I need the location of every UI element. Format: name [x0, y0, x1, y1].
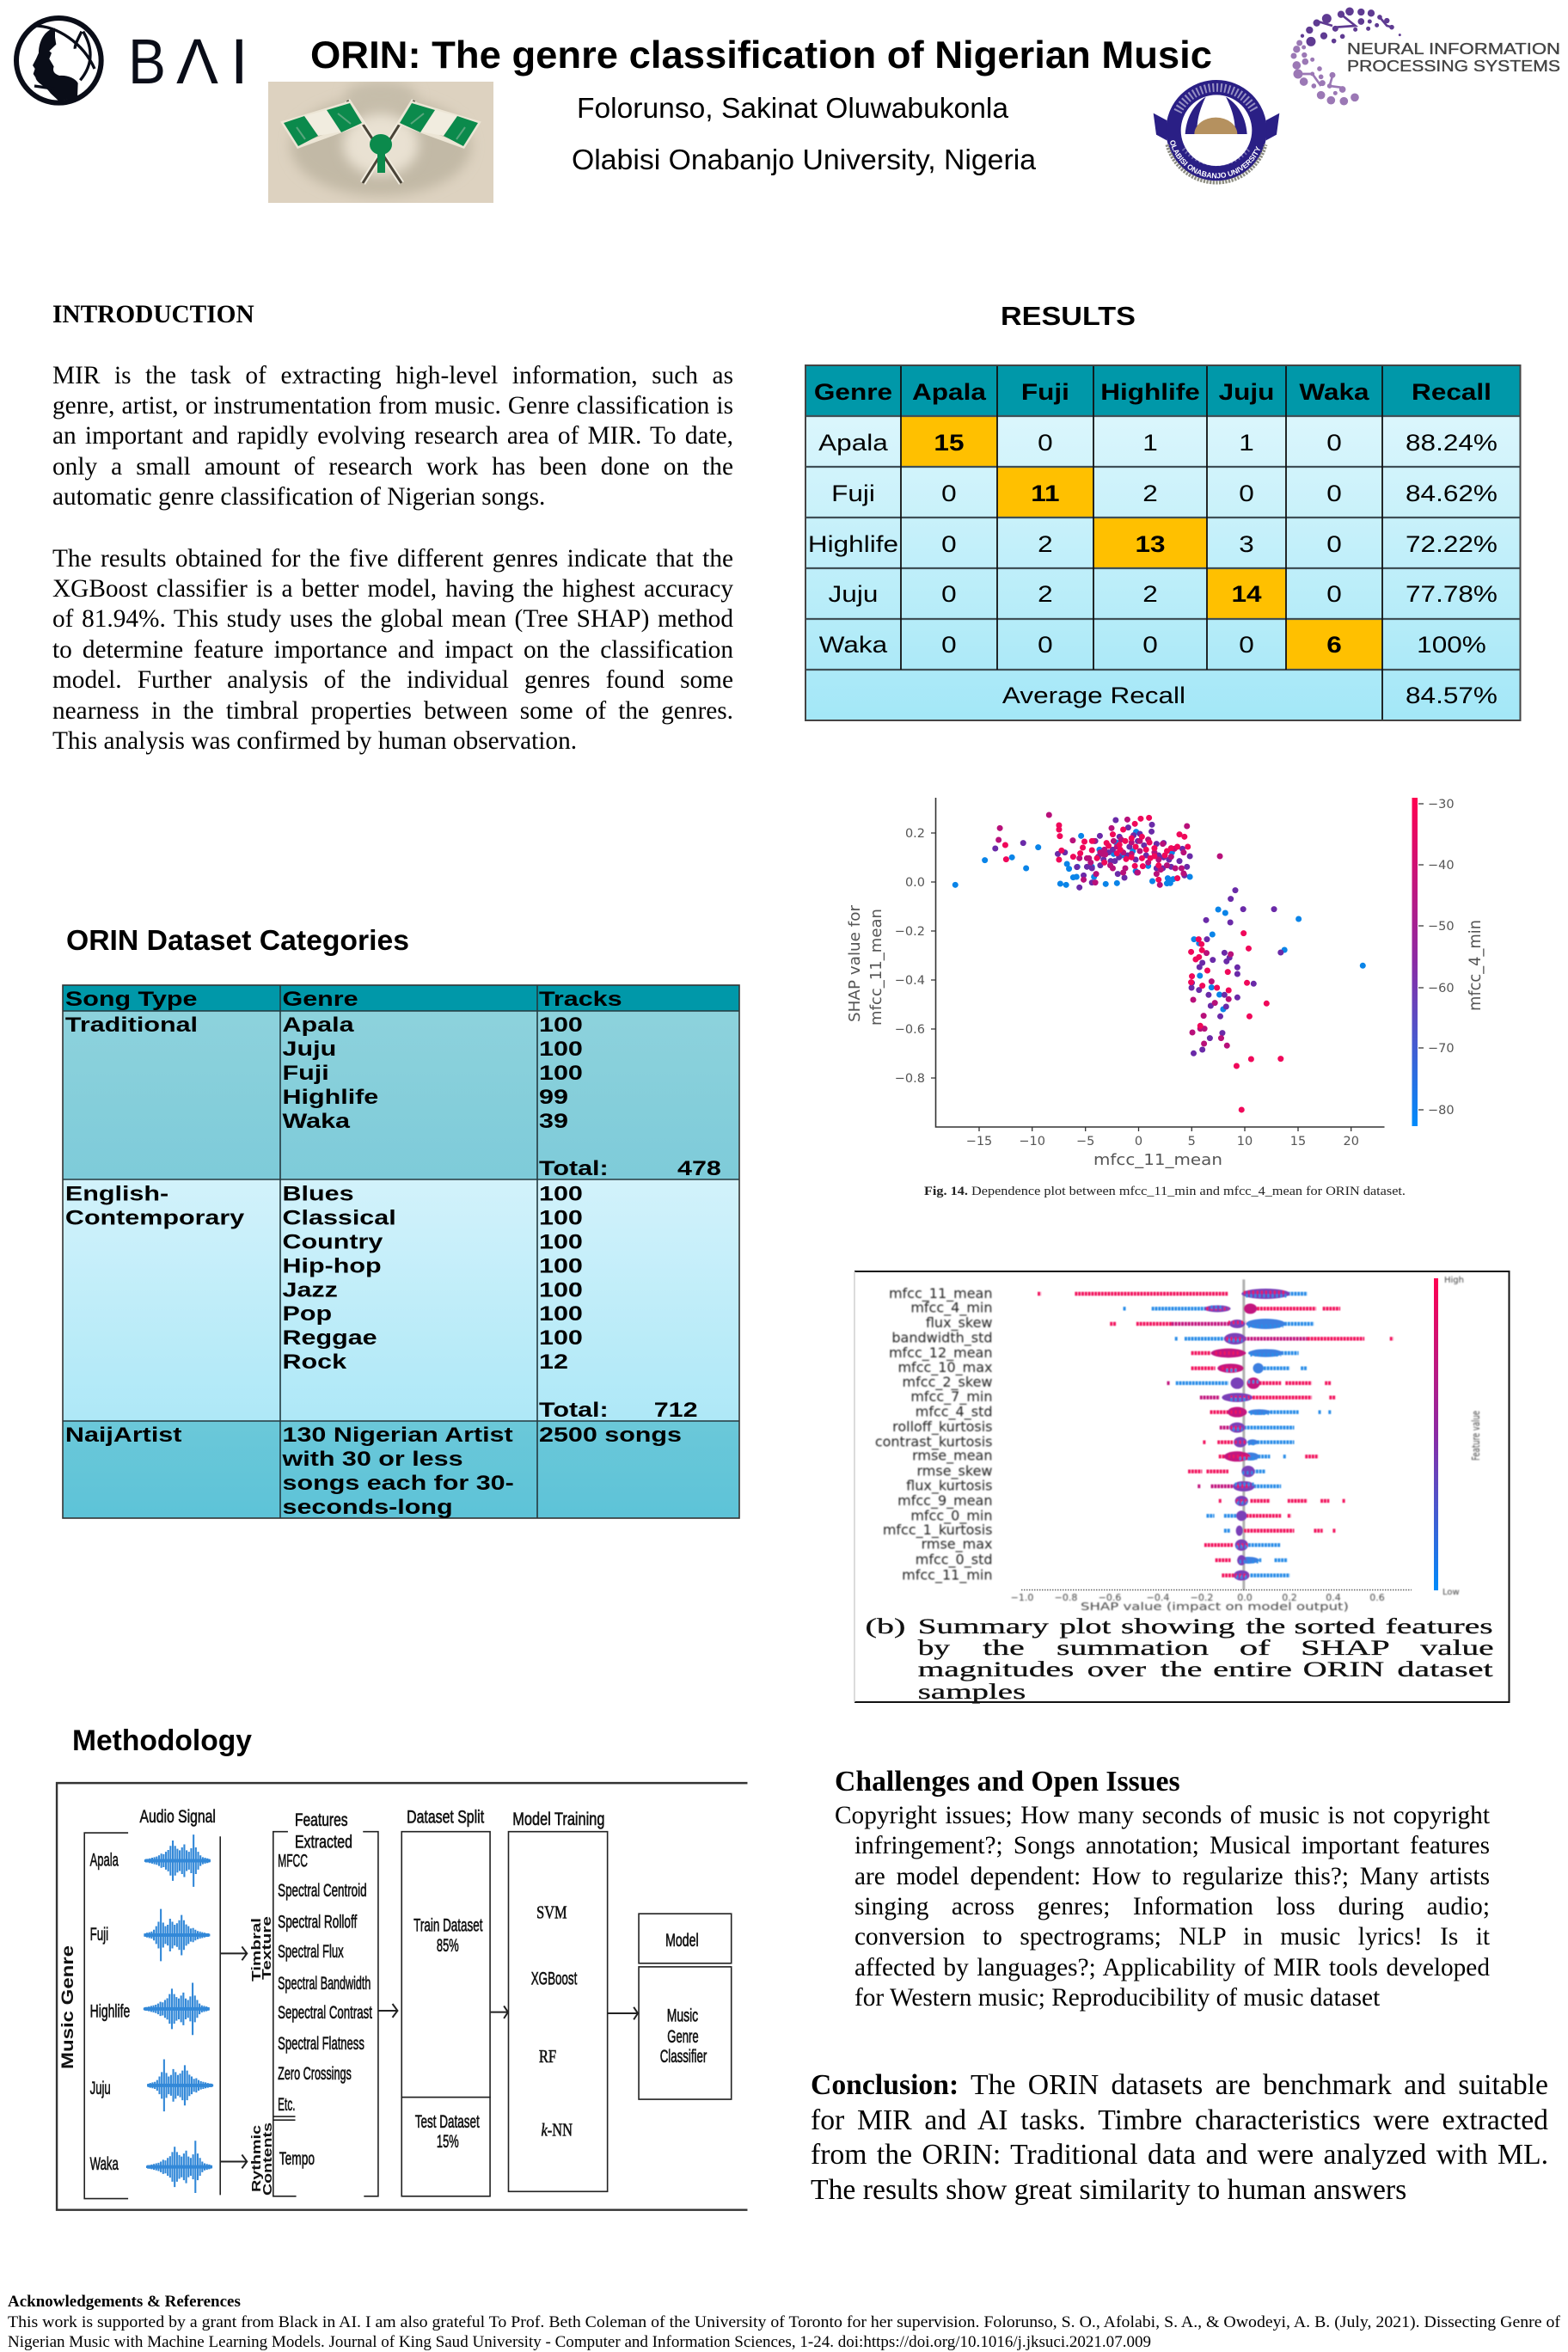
column: dataset split: 15% [437, 2131, 459, 2152]
table header: Highlife [1100, 380, 1200, 405]
row: English-Contemporary: Country [283, 1230, 383, 1253]
column: audio signals by genre [84, 1806, 220, 2199]
affiliation: Olabisi Onabanjo University, Nigeria [572, 144, 1037, 175]
rotated labels: Texture [260, 1916, 274, 1980]
figure caption: showing [1121, 1614, 1235, 1638]
row: English-Contemporary: 100 [539, 1182, 583, 1205]
row: traditional: Fuji [283, 1061, 329, 1084]
figure caption: dataset [1397, 1657, 1493, 1681]
text block: introduction paragraph 2: of 81.94%. This study uses the global mean (Tree SHAP) method [52, 605, 733, 633]
figure caption: Summary [918, 1614, 1050, 1638]
acknowledgements and references [8, 2293, 1561, 2351]
x axis: 0.6 [1369, 1592, 1385, 1603]
tick labels: 0 [1135, 1135, 1142, 1148]
text block: challenges and open issues: infringement?; Songs annotation; Musical important features [854, 1832, 1490, 1859]
text block: challenges and open issues: singing across genres; Information loss during audio; [854, 1893, 1490, 1920]
row: Fuji: 0 [941, 481, 957, 506]
feature labels: mfcc_11_mean [889, 1285, 992, 1302]
text block: introduction paragraph 2: XGBoost classifier is a better model, having the highest accuracy [52, 575, 733, 603]
row: traditional: Apala [283, 1013, 354, 1036]
highlighted diagonal cells [901, 416, 1382, 670]
logo letters: Λ [176, 26, 219, 97]
colour bar: −70 [1428, 1042, 1455, 1056]
axis titles: mfcc_11_mean [867, 909, 885, 1026]
row: Highlife: 13 [1136, 532, 1166, 557]
row: English-Contemporary: 100 [539, 1302, 583, 1325]
tick labels: 0.2 [905, 827, 925, 841]
arrows [220, 1946, 638, 2168]
column: features extracted: Extracted [295, 1831, 352, 1852]
column: model output: Classifier [660, 2046, 707, 2067]
diagram: methodology pipeline: Test Dataset [415, 2111, 480, 2131]
row: Waka: 0 [1239, 633, 1254, 658]
row: Waka: 0 [1038, 633, 1053, 658]
diagram: methodology pipeline: Train Dataset [413, 1914, 483, 1935]
text block: challenges and open issues: affected by languages?; Applicability of MIR tools developed [854, 1954, 1490, 1981]
colour bar: −80 [1428, 1104, 1455, 1118]
logo letters: B [128, 26, 166, 97]
column: model output: Genre [667, 2026, 699, 2046]
table header [814, 380, 1491, 405]
row: Waka: 100% [1417, 633, 1486, 658]
text block: introduction paragraph 1 [52, 362, 733, 511]
row: Fuji [831, 481, 1498, 506]
row: Apala [818, 431, 1498, 456]
row: English-Contemporary: 100 [539, 1278, 583, 1302]
figure caption [866, 1614, 1494, 1704]
acknowledgements and references: Nigerian Music with Machine Learning Models. Journal of King Saud University - Computer and Information Sciences, 1-24. doi:https://doi.org/10.1016/j.jksuci.2021.07.009 [8, 2333, 1151, 2351]
column: features extracted: Features [295, 1810, 348, 1830]
column: model training: Model Training [512, 1809, 604, 1829]
frame [854, 1271, 1510, 1702]
logo letters [128, 26, 248, 97]
heading: introduction: INTRODUCTION [52, 301, 254, 328]
row: NaijArtist [65, 1423, 682, 1518]
row: Waka: 0 [941, 633, 957, 658]
table header: Waka [1299, 380, 1369, 405]
column: model training: XGBoost [531, 1968, 577, 1988]
row: English-Contemporary: Blues [283, 1182, 354, 1205]
column: audio signals by genre: Audio Signal [139, 1806, 216, 1827]
row: English-Contemporary: Pop [283, 1302, 332, 1325]
text block: introduction paragraph 1: automatic genre classification of Nigerian songs. [52, 483, 545, 511]
tick labels [895, 827, 1359, 1148]
row: English-Contemporary: 100 [539, 1230, 583, 1253]
text block: challenges and open issues: Copyright issues; How many seconds of music is not copyright [835, 1802, 1490, 1829]
text block: conclusion: Conclusion: The ORIN datasets are benchmark and suitable [811, 2069, 1548, 2101]
row: Apala: 0 [1038, 431, 1053, 456]
row: English-Contemporary: Reggae [283, 1326, 377, 1349]
tick labels: 0.0 [905, 876, 925, 890]
colour bar: −30 [1428, 798, 1455, 812]
row: Apala: Apala [818, 431, 889, 456]
beeswarm rows [1038, 1279, 1393, 1590]
feature labels: mfcc_12_mean [889, 1344, 992, 1362]
figure caption: samples [918, 1680, 1026, 1704]
tick labels: 5 [1188, 1135, 1196, 1148]
figure caption: summation [1057, 1636, 1209, 1660]
text block: introduction paragraph 1: an important and rapidly evolving research area of MIR. To date, [52, 422, 733, 450]
figure caption: magnitudes [918, 1657, 1074, 1681]
axis titles [846, 904, 1222, 1169]
feature labels: mfcc_11_min [902, 1566, 992, 1583]
row: English-Contemporary: 100 [539, 1254, 583, 1277]
row: Highlife: Highlife [808, 532, 898, 557]
x axis: −0.2 [1191, 1592, 1213, 1603]
column: model training: k-NN [542, 2120, 573, 2141]
text block: challenges and open issues: are model dependent: How to regularize this?; Many artists [854, 1863, 1490, 1890]
row: English-Contemporary: Contemporary [65, 1206, 245, 1229]
figure caption: entire [1213, 1657, 1292, 1681]
row: Apala: 1 [1142, 431, 1158, 456]
icon: purple dot arc [1291, 8, 1400, 105]
diagram: methodology pipeline: Spectral Centroid [278, 1880, 367, 1900]
row: Highlife: 3 [1239, 532, 1254, 557]
plot axes [935, 798, 1384, 1127]
heading: dataset categories: ORIN Dataset Categories [66, 924, 409, 956]
row: traditional: Juju [283, 1037, 336, 1060]
row: NaijArtist: 2500 songs [539, 1423, 682, 1446]
column: audio signals by genre: Juju [90, 2078, 111, 2098]
rotated labels: Timbral [250, 1918, 264, 1981]
row: traditional: Total: [539, 1156, 609, 1179]
logo letters: I [230, 26, 248, 97]
row: English-Contemporary: 100 [539, 1326, 583, 1349]
text block: introduction paragraph 2: to determine feature importance and impact on the classification [52, 636, 733, 664]
feature labels: flux_skew [926, 1314, 992, 1332]
x axis: 0.2 [1282, 1592, 1297, 1603]
x axis: −0.6 [1099, 1592, 1121, 1603]
image: crossed Nigerian flags [268, 81, 493, 203]
table header: Song Type [65, 987, 197, 1010]
colour bar: −50 [1428, 920, 1455, 934]
row: NaijArtist: seconds-long [283, 1495, 453, 1518]
row: traditional: 99 [539, 1085, 568, 1108]
feature labels [875, 1285, 992, 1583]
figure caption: plot [1060, 1614, 1111, 1638]
x axis: −0.8 [1055, 1592, 1077, 1603]
row: Fuji: 0 [1239, 481, 1254, 506]
tick labels: 15 [1290, 1135, 1306, 1148]
row: traditional: 39 [539, 1109, 568, 1132]
chart: SHAP summary plot [854, 1271, 1510, 1704]
column: features extracted [273, 1810, 378, 2196]
author name: Folorunso, Sakinat Oluwabukonla [577, 92, 1009, 124]
row: average recall: 84.57% [1406, 683, 1498, 708]
feature labels: mfcc_0_min [910, 1507, 992, 1524]
feature labels: flux_kurtosis [906, 1477, 992, 1494]
column: features extracted: Tempo [279, 2148, 315, 2168]
row: English-Contemporary: Jazz [283, 1278, 338, 1302]
row: Apala: 0 [1326, 431, 1342, 456]
text block: challenges and open issues: for Western music; Reproducibility of music dataset [854, 1984, 1380, 2012]
text block: introduction paragraph 2: nearness in the timbral properties between some of the genres. [52, 697, 733, 725]
x axis: −0.4 [1147, 1592, 1169, 1603]
tick labels: 20 [1343, 1135, 1359, 1148]
figure caption: of [1240, 1636, 1271, 1660]
diagram: methodology pipeline: Spectral Bandwidth [278, 1973, 371, 1993]
tick labels: −0.4 [895, 974, 925, 988]
row: NaijArtist: songs each for 30- [283, 1471, 514, 1494]
colour bar: mfcc_4_min [1466, 920, 1485, 1011]
row: Highlife [808, 532, 1498, 557]
row: English-Contemporary: Total: [539, 1398, 609, 1421]
column: features extracted: MFCC [278, 1850, 308, 1871]
text block: conclusion: for MIR and AI tasks. Timbre characteristics were extracted [811, 2104, 1548, 2135]
column: dataset split [401, 1807, 490, 2196]
row: traditional: 100 [539, 1013, 583, 1036]
table header: Fuji [1021, 380, 1069, 405]
row: English-Contemporary [65, 1182, 698, 1421]
logo wordmark: NEURAL INFORMATION [1347, 40, 1560, 58]
x axis: SHAP value (impact on model output) [1081, 1600, 1349, 1613]
column: features extracted: Spectral Flux [278, 1941, 344, 1961]
feature labels: mfcc_10_max [897, 1359, 992, 1376]
tick labels: −0.6 [895, 1023, 925, 1037]
colour bar: Feature value [1470, 1411, 1482, 1461]
figure caption: features [1386, 1614, 1493, 1638]
feature labels: mfcc_0_std [916, 1551, 992, 1568]
row: Juju: 0 [941, 582, 957, 607]
table header: Juju [1219, 380, 1274, 405]
row: traditional: 100 [539, 1061, 583, 1084]
tick labels: −15 [966, 1135, 992, 1148]
logo wordmark: PROCESSING SYSTEMS [1347, 57, 1560, 75]
feature labels: bandwidth_std [891, 1330, 992, 1347]
figure caption: SHAP [1301, 1636, 1390, 1660]
row: Highlife: 0 [941, 532, 957, 557]
row: traditional: Traditional [65, 1013, 198, 1036]
row: English-Contemporary: Classical [283, 1206, 396, 1229]
heading: methodology: Methodology [72, 1724, 252, 1757]
row: Waka: 6 [1326, 633, 1342, 658]
row: Highlife: 2 [1038, 532, 1053, 557]
column: audio signals by genre: Highlife [90, 2000, 130, 2021]
column: model training: SVM [536, 1902, 567, 1923]
acknowledgements and references: Acknowledgements & References [8, 2293, 241, 2311]
tick labels: −5 [1076, 1135, 1094, 1148]
figure caption: by [918, 1636, 951, 1660]
diagram: methodology pipeline: Spectral Flatness [278, 2033, 364, 2053]
row: Waka [819, 633, 1486, 658]
row: Fuji: 0 [1326, 481, 1342, 506]
column: dataset split: Dataset Split [407, 1807, 484, 1827]
logo: Black in AI [16, 18, 248, 103]
row: Fuji: 84.62% [1406, 481, 1498, 506]
x axis [1011, 1590, 1412, 1613]
row: traditional: 478 [677, 1156, 721, 1179]
table header: Tracks [539, 987, 622, 1010]
text block: challenges and open issues [835, 1802, 1490, 2012]
feature labels: rmse_mean [912, 1448, 992, 1465]
table header: Apala [912, 380, 987, 405]
colour bar: Low [1442, 1588, 1460, 1597]
feature labels: rmse_skew [916, 1463, 992, 1480]
row: Highlife: 72.22% [1406, 532, 1498, 557]
column: audio signals by genre: Apala [90, 1850, 119, 1870]
icon: waveforms [144, 1834, 212, 2193]
row: Fuji: 2 [1142, 481, 1158, 506]
text block: introduction paragraph 1: genre, artist, or instrumentation from music. Genre classification is [52, 392, 733, 420]
diagram: methodology pipeline [57, 1783, 747, 2210]
figure caption: value [1420, 1636, 1494, 1660]
feature labels: mfcc_7_min [910, 1388, 992, 1406]
text block: introduction paragraph 2: model. Further analysis of the individual genres found some [52, 666, 733, 694]
tick labels: −10 [1019, 1135, 1045, 1148]
column: features extracted: Etc. [278, 2094, 296, 2115]
row: NaijArtist: with 30 or less [281, 1447, 463, 1470]
feature labels: mfcc_2_skew [903, 1374, 992, 1391]
figure caption: over [1087, 1657, 1146, 1681]
text block: conclusion: from the ORIN: Traditional data and were analyzed with ML. [811, 2139, 1548, 2171]
x axis: −1.0 [1011, 1592, 1033, 1603]
text block: introduction paragraph 1: MIR is the task of extracting high-level information, such as [52, 362, 733, 389]
row: Fuji: Fuji [831, 481, 875, 506]
row: Juju [829, 582, 1498, 607]
column: model output: Model [665, 1930, 699, 1950]
feature labels: rolloff_kurtosis [892, 1418, 992, 1436]
row: Juju: Juju [829, 582, 878, 607]
row: Fuji: 11 [1031, 481, 1060, 506]
figure caption: the [983, 1636, 1025, 1660]
rotated labels: Music Genre [59, 1945, 77, 2069]
chart: SHAP dependence plot [846, 798, 1485, 1198]
row: English-Contemporary: 12 [539, 1350, 568, 1373]
column: model training: RF [539, 2047, 556, 2067]
text block: introduction paragraph 2: The results obtained for the five different genres indicate that the [52, 545, 733, 573]
text block: introduction paragraph 2 [52, 545, 733, 755]
row: NaijArtist: 130 Nigerian Artist [283, 1423, 513, 1446]
table header: Genre [814, 380, 892, 405]
text block: introduction paragraph 2: This analysis was confirmed by human observation. [52, 727, 577, 755]
text block: conclusion: The results show great similarity to human answers [811, 2173, 1406, 2206]
column: model output [639, 1914, 732, 2099]
icon: globe and faces emblem [16, 18, 101, 103]
tick labels: 10 [1237, 1135, 1253, 1148]
text block: introduction paragraph 1: only a small amount of research work has been done on the [52, 453, 733, 481]
row: Apala: 88.24% [1406, 431, 1498, 456]
row: traditional: Waka [283, 1109, 351, 1132]
row: English-Contemporary: Rock [283, 1350, 347, 1373]
row: NaijArtist: NaijArtist [65, 1423, 181, 1446]
row: Juju: 2 [1142, 582, 1158, 607]
colour bar: High [1444, 1276, 1464, 1285]
axis titles: mfcc_11_mean [1093, 1151, 1222, 1169]
row: English-Contemporary: Hip-hop [283, 1254, 382, 1277]
figure caption: Fig. 14. Dependence plot between mfcc_11_min and mfcc_4_mean for ORIN dataset. [924, 1185, 1406, 1198]
row: English-Contemporary: 100 [539, 1206, 583, 1229]
table header [65, 987, 622, 1010]
figure caption: (b) [866, 1614, 905, 1638]
row: English-Contemporary: English- [65, 1182, 168, 1205]
row: traditional: 100 [539, 1037, 583, 1060]
diagram: methodology pipeline: Sepectral Contrast [278, 2002, 372, 2023]
row: average recall: Average Recall [1002, 683, 1185, 708]
row: Waka: Waka [819, 633, 888, 658]
table header: Genre [283, 987, 358, 1010]
axis titles: SHAP value for [846, 904, 864, 1022]
figure caption: sorted [1295, 1614, 1375, 1638]
logo: Olabisi Onabanjo University crest [1154, 80, 1279, 184]
rotated labels [59, 1916, 275, 2196]
table: confusion matrix and recall [805, 365, 1520, 720]
row: Juju: 0 [1326, 582, 1342, 607]
heading: results: RESULTS [1001, 301, 1136, 331]
heading: challenges and open issues: Challenges and Open Issues [835, 1766, 1180, 1798]
text block: challenges and open issues: conversion to spectrograms; NLP in music lyrics! Is it [854, 1923, 1490, 1951]
row: Juju: 14 [1231, 582, 1262, 607]
tick labels: −0.2 [895, 925, 925, 939]
column: features extracted: Spectral Rolloff [278, 1911, 357, 1932]
figure caption: ORIN [1303, 1657, 1384, 1681]
column: audio signals by genre: Fuji [90, 1924, 108, 1944]
feature labels: mfcc_1_kurtosis [883, 1522, 992, 1539]
feature labels: mfcc_4_std [916, 1403, 992, 1420]
figure caption: the [1161, 1657, 1202, 1681]
column: model training [508, 1809, 608, 2191]
colour bar: −60 [1428, 982, 1455, 995]
title: ORIN: The genre classification of Nigerian Music [310, 34, 1212, 77]
scatter points [955, 815, 1363, 1110]
row: Highlife: 0 [1326, 532, 1342, 557]
feature labels: contrast_kurtosis [875, 1433, 992, 1450]
row: traditional [65, 1013, 721, 1179]
column: model output: Music [667, 2006, 698, 2025]
row: Apala: 1 [1239, 431, 1254, 456]
figure caption: the [1246, 1614, 1285, 1638]
feature labels: mfcc_4_min [910, 1300, 992, 1317]
column: features extracted: Zero Crossings [278, 2063, 352, 2084]
logo wordmark [1347, 40, 1560, 75]
x axis: 0.0 [1237, 1592, 1253, 1603]
colour bar [1412, 798, 1485, 1126]
feature labels: rmse_max [922, 1536, 992, 1553]
acknowledgements and references: This work is supported by a grant from Black in AI. I am also grateful To Prof. Beth Coleman of the University of Toronto for her supervision. Folorunso, S. O., Afolabi, S. A., & Owodeyi, A. B. (July, 2021). Dissecting Genre of [8, 2313, 1561, 2331]
column: dataset split: 85% [437, 1935, 459, 1956]
row: Waka: 0 [1142, 633, 1158, 658]
row: traditional: Highlife [283, 1085, 378, 1108]
tick labels: −0.8 [895, 1072, 925, 1086]
row: Juju: 2 [1038, 582, 1053, 607]
table header: Recall [1412, 380, 1491, 405]
column: audio signals by genre: Waka [90, 2153, 119, 2174]
logo: Olabisi Onabanjo University crest: OLABISI ONABANJO UNIVERSITY [1170, 140, 1260, 179]
row: Juju: 77.78% [1406, 582, 1498, 607]
colour bar: −40 [1428, 859, 1455, 873]
rotated labels: Contents [261, 2122, 275, 2196]
logo: Neural Information Processing Systems [1291, 8, 1560, 105]
feature labels: mfcc_9_mean [897, 1492, 992, 1510]
text block: conclusion [811, 2069, 1548, 2206]
rotated labels: Rythmic [250, 2125, 264, 2192]
x axis: 0.4 [1326, 1592, 1341, 1603]
row: English-Contemporary: 712 [654, 1398, 698, 1421]
colour bar [1434, 1276, 1482, 1597]
table: ORIN dataset categories [63, 985, 739, 1518]
row: Apala: 15 [934, 431, 964, 456]
row: average recall [1002, 683, 1498, 708]
